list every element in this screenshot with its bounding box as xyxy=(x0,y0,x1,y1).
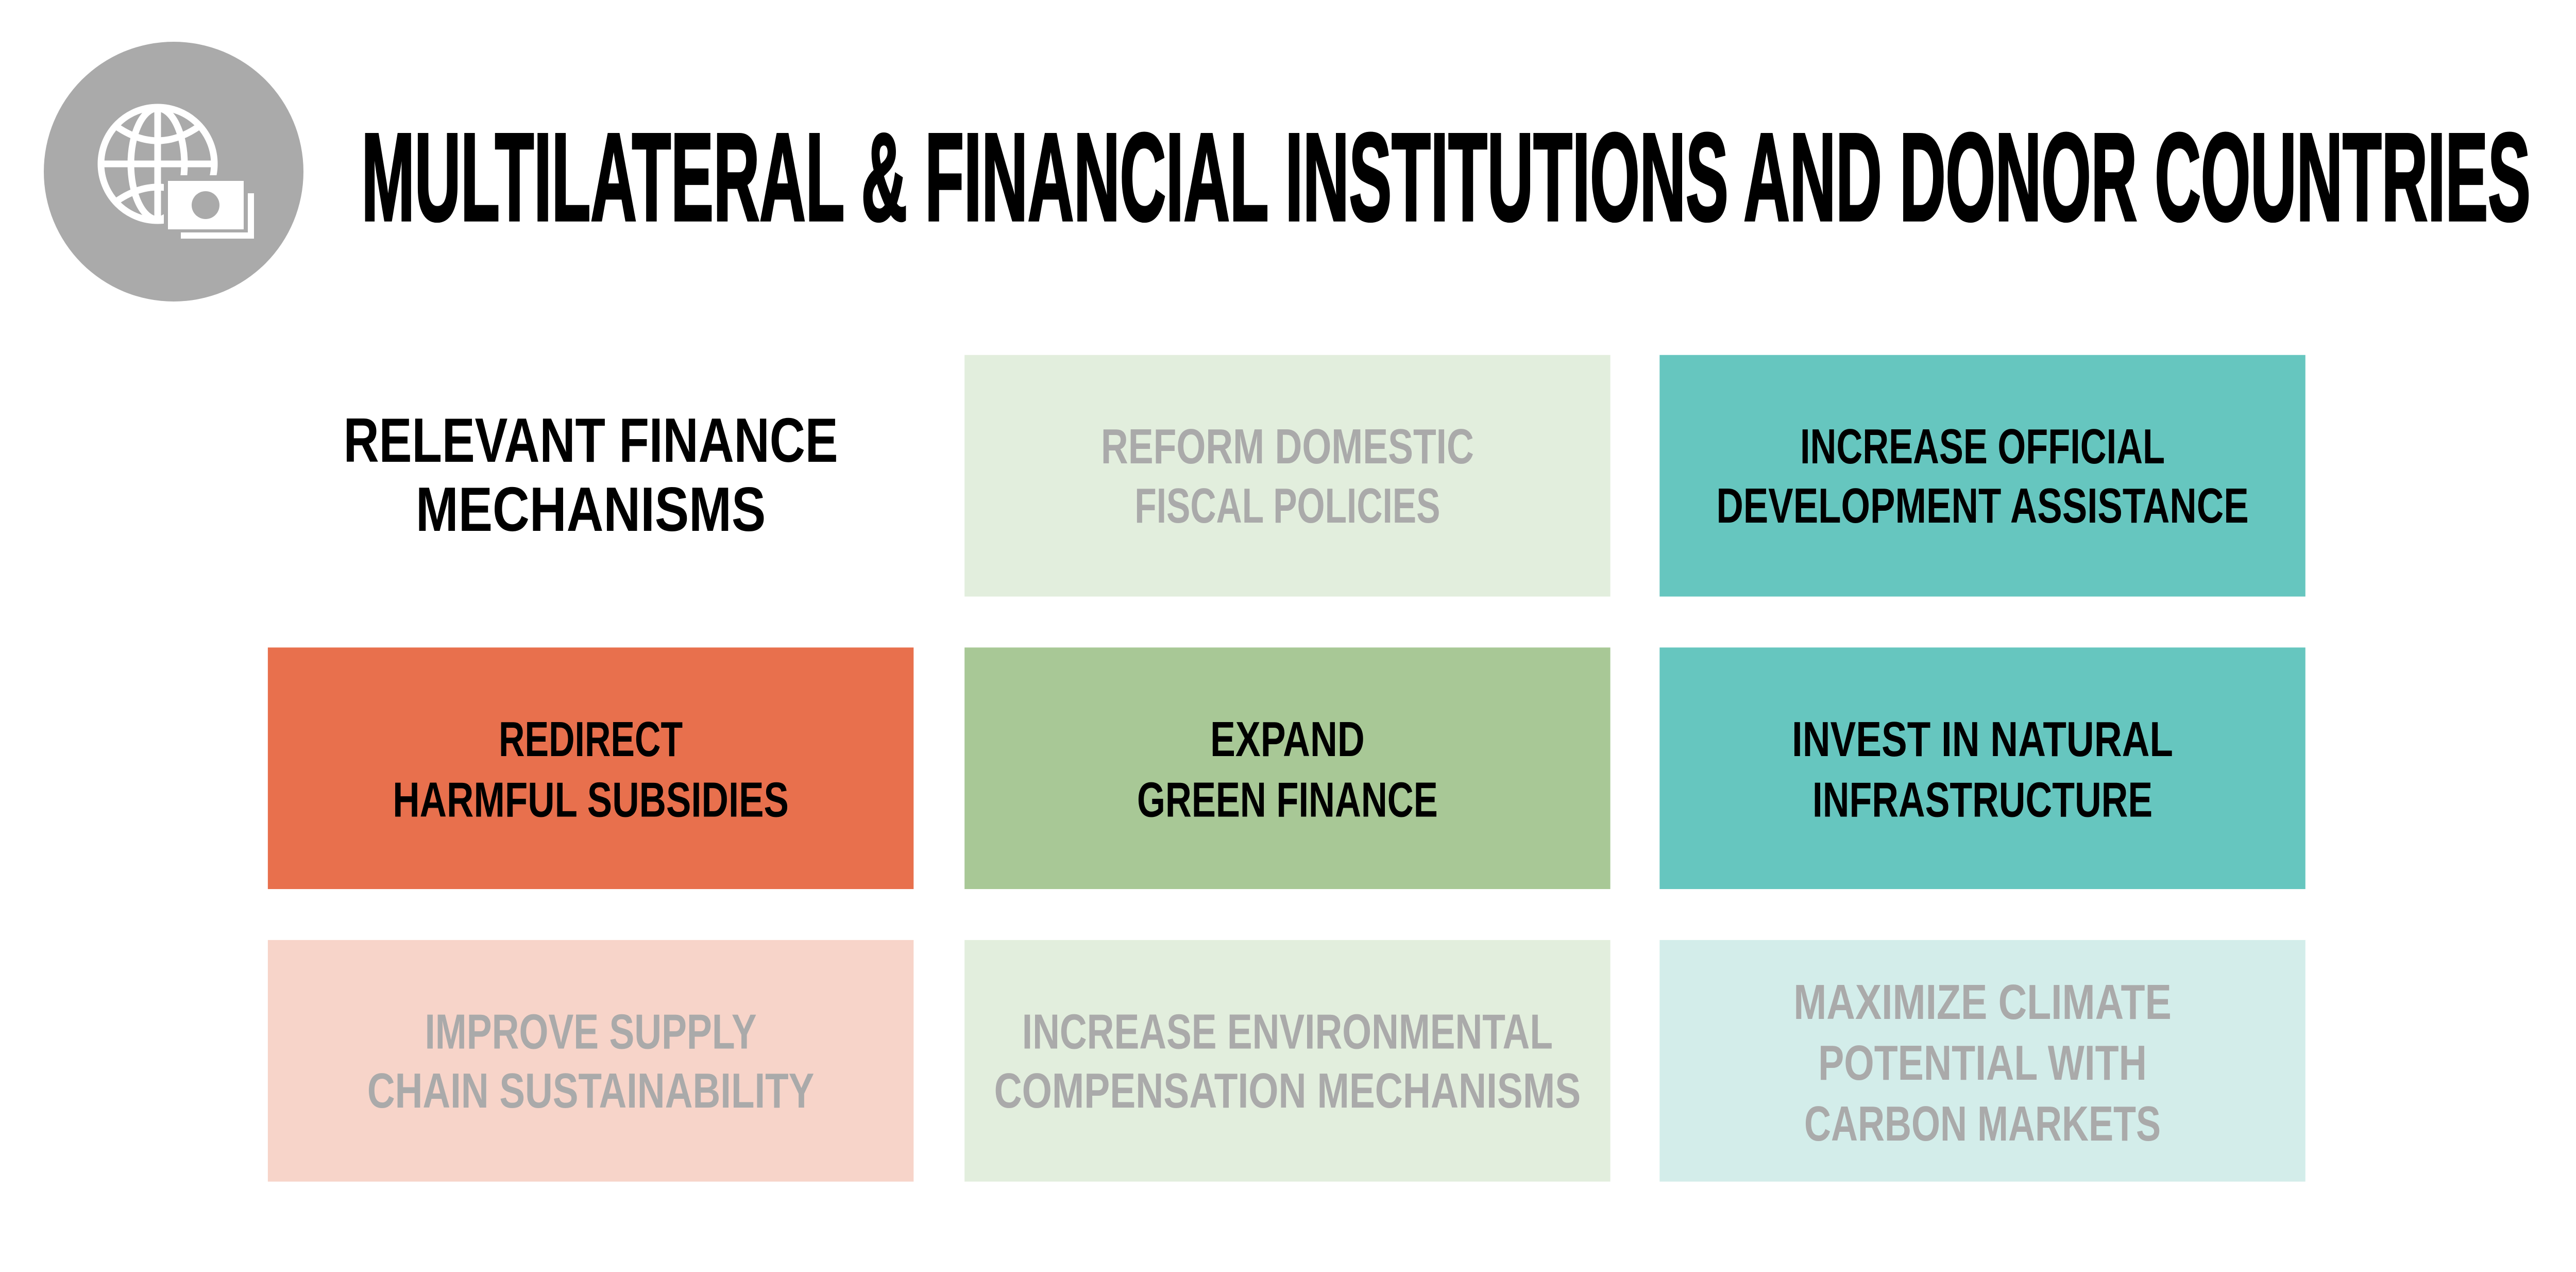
panel: reform domestic fiscal policies: REFORM DOMESTIC xyxy=(1101,419,1474,474)
panel: invest in natural infrastructure: INFRASTRUCTURE xyxy=(1812,773,2153,828)
panel: maximize climate potential with carbon markets xyxy=(1659,940,2306,1182)
heading: relevant finance mechanisms xyxy=(344,405,838,544)
panel: improve supply chain sustainability: IMPROVE SUPPLY xyxy=(425,1004,757,1059)
panel: increase official development assistance: INCREASE OFFICIAL xyxy=(1800,419,2165,474)
panel: expand green finance: GREEN FINANCE xyxy=(1137,773,1438,828)
panel: maximize climate potential with carbon markets: POTENTIAL WITH xyxy=(1818,1035,2147,1091)
panel: increase official development assistance xyxy=(1659,355,2306,596)
panel: reform domestic fiscal policies: FISCAL POLICIES xyxy=(1134,478,1440,533)
panel: expand green finance: EXPAND xyxy=(1210,712,1365,767)
heading: relevant finance mechanisms: MECHANISMS xyxy=(416,474,766,544)
panel: redirect harmful subsidies xyxy=(268,647,913,889)
panel: reform domestic fiscal policies xyxy=(964,355,1611,596)
panel: increase environmental compensation mechanisms: INCREASE ENVIRONMENTAL xyxy=(1022,1004,1553,1059)
panel: increase environmental compensation mechanisms: COMPENSATION MECHANISMS xyxy=(994,1063,1581,1118)
panel: redirect harmful subsidies: HARMFUL SUBSIDIES xyxy=(393,773,789,828)
panel: invest in natural infrastructure xyxy=(1659,647,2306,889)
heading: relevant finance mechanisms: RELEVANT FINANCE xyxy=(344,405,838,475)
icon: globe with money xyxy=(44,42,303,302)
panel: expand green finance xyxy=(964,647,1611,889)
panel: increase environmental compensation mechanisms xyxy=(964,940,1611,1182)
panel: maximize climate potential with carbon markets: CARBON MARKETS xyxy=(1804,1096,2161,1151)
panel: increase official development assistance: DEVELOPMENT ASSISTANCE xyxy=(1716,478,2249,533)
panel: improve supply chain sustainability xyxy=(268,940,913,1182)
panel: improve supply chain sustainability: CHAIN SUSTAINABILITY xyxy=(367,1063,814,1118)
panel: redirect harmful subsidies: REDIRECT xyxy=(499,712,683,767)
panel: maximize climate potential with carbon markets: MAXIMIZE CLIMATE xyxy=(1793,975,2172,1030)
panel: invest in natural infrastructure: INVEST IN NATURAL xyxy=(1792,712,2173,767)
